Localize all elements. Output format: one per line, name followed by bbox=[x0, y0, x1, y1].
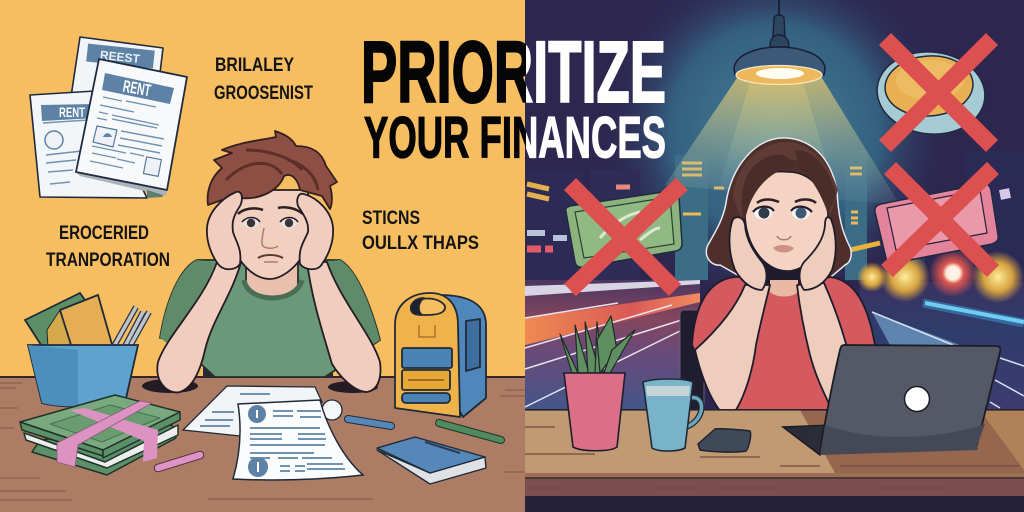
icon: laptop bbox=[783, 345, 1000, 455]
label: right: OULLX THAPS bbox=[362, 233, 479, 254]
icons: pens bbox=[158, 419, 501, 468]
title: YOUR FINANCES bbox=[364, 106, 666, 170]
front rent document bbox=[76, 59, 187, 198]
label: right: STICNS bbox=[362, 208, 420, 229]
road right bbox=[860, 282, 1024, 410]
label: right bbox=[362, 208, 479, 254]
icon: blue cup of supplies bbox=[25, 293, 149, 407]
icon: potted plant bbox=[560, 316, 635, 451]
left background bbox=[0, 0, 525, 512]
left document: RENT bbox=[59, 104, 85, 120]
crossed item: coin bbox=[873, 39, 992, 146]
right background bbox=[525, 0, 1024, 512]
icon: notebook bbox=[377, 437, 486, 484]
person: stressed man bbox=[157, 131, 380, 392]
label: top: GROOSENIST bbox=[214, 83, 313, 104]
city skyline bbox=[525, 150, 1024, 280]
face bbox=[238, 207, 303, 262]
label: left: EROCERIED bbox=[59, 223, 149, 244]
torso dark sides bbox=[203, 330, 333, 377]
icon: paperwork bbox=[183, 386, 363, 480]
neck bbox=[246, 262, 298, 296]
label: left: TRANPORATION bbox=[46, 250, 170, 271]
chair bbox=[680, 310, 704, 410]
back document bbox=[66, 37, 163, 140]
under-chin shadow bbox=[750, 262, 825, 290]
hair bbox=[208, 131, 337, 209]
shirt bbox=[692, 277, 875, 410]
label: left bbox=[46, 223, 170, 271]
table right bbox=[525, 409, 1024, 512]
collar bbox=[244, 280, 302, 298]
crossed item: green wallet bbox=[566, 184, 682, 290]
sky glow bbox=[600, 0, 950, 300]
title: PRIORITIZE bbox=[361, 24, 666, 121]
hair shading bbox=[226, 150, 318, 190]
icon: ceiling lamp bbox=[734, 0, 825, 84]
back hair bbox=[706, 138, 851, 282]
hands bbox=[207, 192, 333, 269]
back document: REEST bbox=[99, 48, 141, 66]
icon: smartphone bbox=[698, 429, 751, 452]
title bbox=[361, 24, 666, 170]
head bbox=[232, 190, 309, 279]
front sheet bbox=[233, 400, 363, 480]
left document bbox=[30, 91, 147, 198]
icon: rent documents bbox=[30, 37, 187, 198]
head bbox=[745, 172, 828, 271]
arms bbox=[157, 262, 380, 392]
icon: money stack bbox=[20, 395, 180, 475]
person: stressed woman bbox=[692, 138, 875, 414]
table left bbox=[0, 376, 525, 512]
road left bbox=[525, 280, 700, 410]
front rent document: RENT bbox=[121, 77, 153, 100]
icon: glass of water bbox=[643, 379, 702, 451]
panel: left stressed scene bbox=[0, 0, 525, 512]
icon: mailbox bbox=[395, 293, 486, 417]
label: top bbox=[214, 55, 313, 104]
panel: right night scene bbox=[525, 0, 1024, 512]
fringe bbox=[733, 142, 838, 222]
hands bbox=[729, 217, 836, 290]
sleeve shadow bbox=[160, 260, 380, 345]
road light streaks bbox=[525, 243, 1024, 408]
shirt bbox=[160, 260, 380, 377]
neck bbox=[770, 280, 798, 296]
arms bbox=[695, 283, 860, 414]
label: top: BRILALEY bbox=[215, 55, 294, 76]
face bbox=[753, 199, 816, 252]
crossed item: pink card bbox=[875, 168, 998, 271]
light cone bbox=[665, 78, 900, 205]
back sheet bbox=[183, 386, 322, 436]
paper curl bbox=[322, 400, 342, 420]
